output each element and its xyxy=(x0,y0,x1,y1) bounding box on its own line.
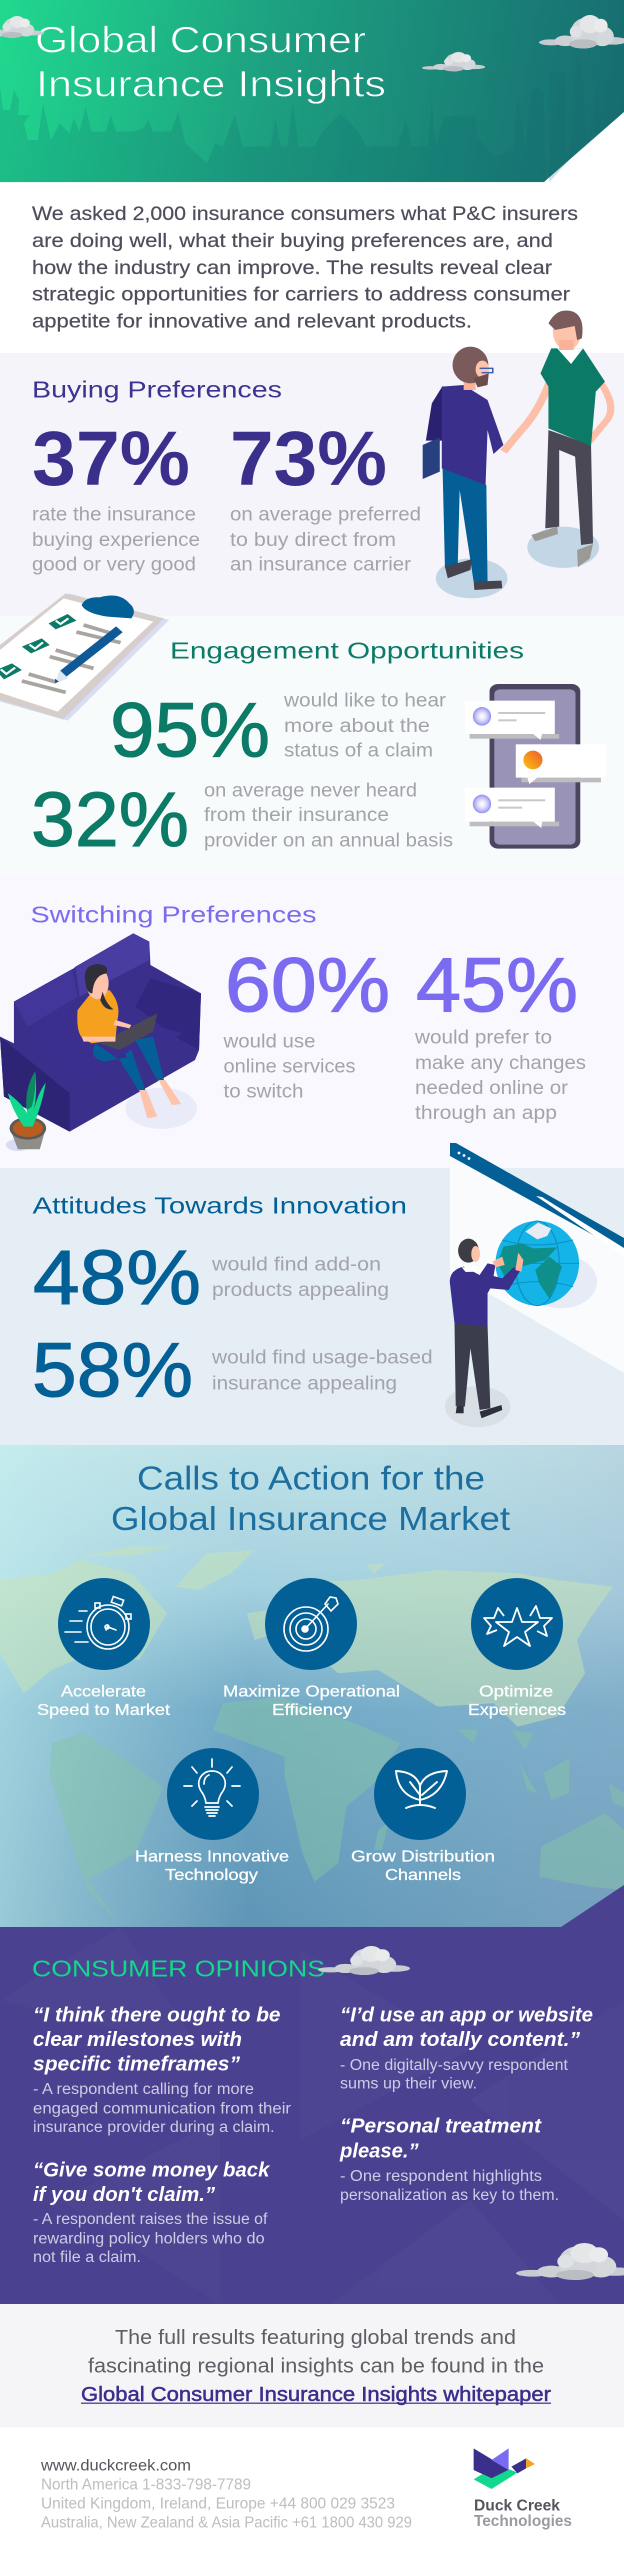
stat 48% xyxy=(33,1235,389,1321)
footer contact details: Australia, New Zealand & Asia Pacific +61 1800 430 929 xyxy=(41,2514,412,2531)
heading: engagement opportunities: Engagement Opportunities xyxy=(170,637,524,663)
quote: app or website: and am totally content.” xyxy=(340,2029,580,2051)
stat 95%: more about the xyxy=(284,716,430,737)
quote: give some money back: if you don't claim.” xyxy=(33,2184,215,2206)
footer contact details xyxy=(40,2458,412,2531)
logo: Duck Creek Technologies xyxy=(474,2448,572,2530)
panel: whitepaper call to action: fascinating regional insights can be found in the xyxy=(88,2355,544,2377)
stat 45%: make any changes xyxy=(415,1053,586,1074)
quote: milestones: clear milestones with xyxy=(33,2029,242,2051)
heading: buying preferences: Buying Preferences xyxy=(32,376,282,402)
quote: personal treatment xyxy=(339,2116,559,2204)
title xyxy=(35,20,386,105)
icon: target with arrow xyxy=(284,1597,338,1651)
icon: three stars xyxy=(484,1606,552,1646)
quote: milestones xyxy=(33,2005,291,2136)
panel: whitepaper call to action xyxy=(0,2304,624,2427)
action: optimize experiences: Experiences xyxy=(468,1702,566,1719)
icon: sprout xyxy=(396,1771,447,1808)
action: accelerate speed to market: Speed to Market xyxy=(37,1702,171,1719)
quote: give some money back: “Give some money back xyxy=(33,2160,270,2182)
footer contact details: North America 1-833-798-7789 xyxy=(41,2476,251,2493)
quote: app or website: - One digitally-savvy respondent xyxy=(340,2057,569,2074)
stat 32% xyxy=(31,777,453,863)
action: accelerate speed to market xyxy=(37,1578,171,1719)
stat 32%: from their insurance xyxy=(204,805,389,826)
stat 48%: would find add-on xyxy=(211,1255,381,1276)
stat 37%: 37% xyxy=(32,416,190,502)
logo mark xyxy=(474,2448,535,2489)
action: harness innovative technology: Technology xyxy=(165,1867,258,1884)
action: grow distribution channels xyxy=(351,1748,495,1884)
city skyline silhouette xyxy=(0,48,601,182)
action: optimize experiences: Optimize xyxy=(479,1684,553,1701)
quote: milestones: - A respondent calling for more xyxy=(33,2081,254,2098)
quote: milestones: insurance provider during a claim. xyxy=(33,2119,275,2136)
stat 95%: would like to hear xyxy=(283,691,447,712)
stat 58%: would find usage-based xyxy=(211,1347,433,1368)
action: maximize operational efficiency: Efficiency xyxy=(272,1702,352,1719)
footer contact details: www.duckcreek.com xyxy=(40,2458,191,2475)
panel: consumer opinions xyxy=(0,1885,624,2304)
stat 37%: rate the insurance xyxy=(32,505,196,526)
action: grow distribution channels: Channels xyxy=(385,1867,461,1884)
stat 95%: 95% xyxy=(110,688,270,774)
panel: buying preferences xyxy=(0,311,624,616)
stat 45% xyxy=(414,943,586,1124)
panel: calls to action xyxy=(0,1445,624,1927)
panel: attitudes towards innovation xyxy=(0,1143,624,1445)
panel: whitepaper call to action: The full results featuring global trends and xyxy=(115,2327,516,2349)
stat 48%: products appealing xyxy=(212,1280,389,1301)
action: harness innovative technology: Harness Innovative xyxy=(135,1849,289,1866)
quote: milestones: specific timeframes” xyxy=(33,2054,240,2076)
stat 60%: would use xyxy=(222,1032,316,1053)
quote: app or website: sums up their view. xyxy=(340,2076,477,2093)
illustration: browser window light wedge and man with globe xyxy=(445,1143,624,1427)
stat 32%: on average never heard xyxy=(204,781,417,802)
icon: light bulb xyxy=(184,1759,240,1816)
quote: personal treatment: personalization as key to them. xyxy=(340,2187,559,2204)
stat 73%: to buy direct from xyxy=(230,530,396,551)
heading: calls to action: Global Insurance Market xyxy=(111,1501,511,1538)
title: Insurance Insights xyxy=(36,64,386,105)
heading: calls to action xyxy=(111,1460,511,1538)
stat 58%: insurance appealing xyxy=(212,1373,397,1394)
header banner xyxy=(0,0,624,182)
cloud right xyxy=(539,15,624,48)
action: optimize experiences xyxy=(468,1578,566,1719)
quote: milestones: “I think there ought to be xyxy=(33,2005,280,2027)
stat 37% xyxy=(32,416,200,576)
world map background xyxy=(0,1547,624,1923)
intro paragraph: appetite for innovative and relevant products. xyxy=(32,311,472,333)
panel: whitepaper call to action: Global Consumer Insurance Insights whitepaper xyxy=(81,2384,551,2406)
stat 45%: 45% xyxy=(416,943,578,1029)
quote: give some money back: - A respondent raises the issue of xyxy=(33,2211,268,2228)
cloud middle xyxy=(422,52,485,71)
icon: stopwatch xyxy=(65,1596,131,1649)
stat 73%: an insurance carrier xyxy=(230,555,412,576)
intro paragraph: We asked 2,000 insurance consumers what P&C insurers xyxy=(32,203,578,225)
stat 58%: 58% xyxy=(32,1328,193,1414)
cloud xyxy=(318,1946,410,1975)
action: accelerate speed to market: Accelerate xyxy=(61,1684,146,1701)
footer contact details: United Kingdom, Ireland, Europe +44 800 029 3523 xyxy=(41,2495,395,2512)
quote: personal treatment: - One respondent highlights xyxy=(340,2168,542,2185)
logo: Duck Creek Technologies: Technologies xyxy=(474,2513,572,2530)
intro paragraph: strategic opportunities for carriers to address consumer xyxy=(32,284,571,306)
action: harness innovative technology xyxy=(135,1748,289,1884)
intro paragraph xyxy=(32,203,578,333)
action: grow distribution channels: Grow Distribution xyxy=(351,1849,495,1866)
stat 37%: buying experience xyxy=(32,530,200,551)
illustration: two people shaking hands xyxy=(423,311,611,598)
faceted pattern xyxy=(0,1927,624,2304)
heading: calls to action: Calls to Action for the xyxy=(137,1460,485,1497)
stat 48%: 48% xyxy=(33,1235,201,1321)
stat 73% xyxy=(230,416,421,576)
illustration: woman on sofa with laptop xyxy=(0,933,201,1151)
logo: Duck Creek Technologies: Duck Creek xyxy=(474,2498,560,2515)
heading: attitudes towards innovation: Attitudes Towards Innovation xyxy=(32,1192,407,1218)
heading: consumer opinions: CONSUMER OPINIONS xyxy=(32,1956,325,1982)
stat 58% xyxy=(32,1328,433,1414)
quote: give some money back: rewarding policy holders who do xyxy=(33,2230,265,2247)
stat 60%: to switch xyxy=(224,1082,304,1103)
quote: app or website xyxy=(340,2005,593,2093)
intro paragraph: how the industry can improve. The results reveal clear xyxy=(32,257,553,279)
quote: milestones: engaged communication from their xyxy=(33,2100,291,2117)
stat 60% xyxy=(222,943,390,1103)
stat 45%: through an app xyxy=(415,1103,557,1124)
title: Global Consumer xyxy=(35,20,366,61)
action: maximize operational efficiency xyxy=(223,1578,400,1719)
quote: personal treatment: please.” xyxy=(339,2140,419,2162)
quote: give some money back: not file a claim. xyxy=(33,2249,141,2266)
stat 37%: good or very good xyxy=(32,555,196,576)
quote: app or website: “I’d use an app or website xyxy=(340,2005,593,2027)
stat 95% xyxy=(110,688,447,774)
intro paragraph: are doing well, what their buying preferences are, and xyxy=(32,230,553,252)
stat 32%: 32% xyxy=(31,777,189,863)
panel: engagement opportunities xyxy=(0,593,624,875)
stat 60%: online services xyxy=(224,1057,356,1078)
stat 32%: provider on an annual basis xyxy=(204,831,453,852)
stat 95%: status of a claim xyxy=(284,741,433,762)
action: maximize operational efficiency: Maximize Operational xyxy=(223,1684,400,1701)
quote: give some money back xyxy=(33,2160,270,2266)
heading: switching preferences: Switching Preferences xyxy=(30,901,316,927)
illustration: clipboard with pencil xyxy=(0,593,169,721)
stat 45%: would prefer to xyxy=(414,1027,552,1048)
stat 60%: 60% xyxy=(225,943,390,1029)
cloud left xyxy=(0,16,44,38)
panel: switching preferences xyxy=(0,875,624,1168)
illustration: phone with chat bubbles xyxy=(465,684,606,849)
stat 73%: on average preferred xyxy=(230,505,421,526)
stat 45%: needed online or xyxy=(415,1078,569,1099)
quote: personal treatment: “Personal treatment xyxy=(340,2116,542,2138)
cloud bottom right xyxy=(516,2243,624,2280)
stat 73%: 73% xyxy=(230,416,387,502)
